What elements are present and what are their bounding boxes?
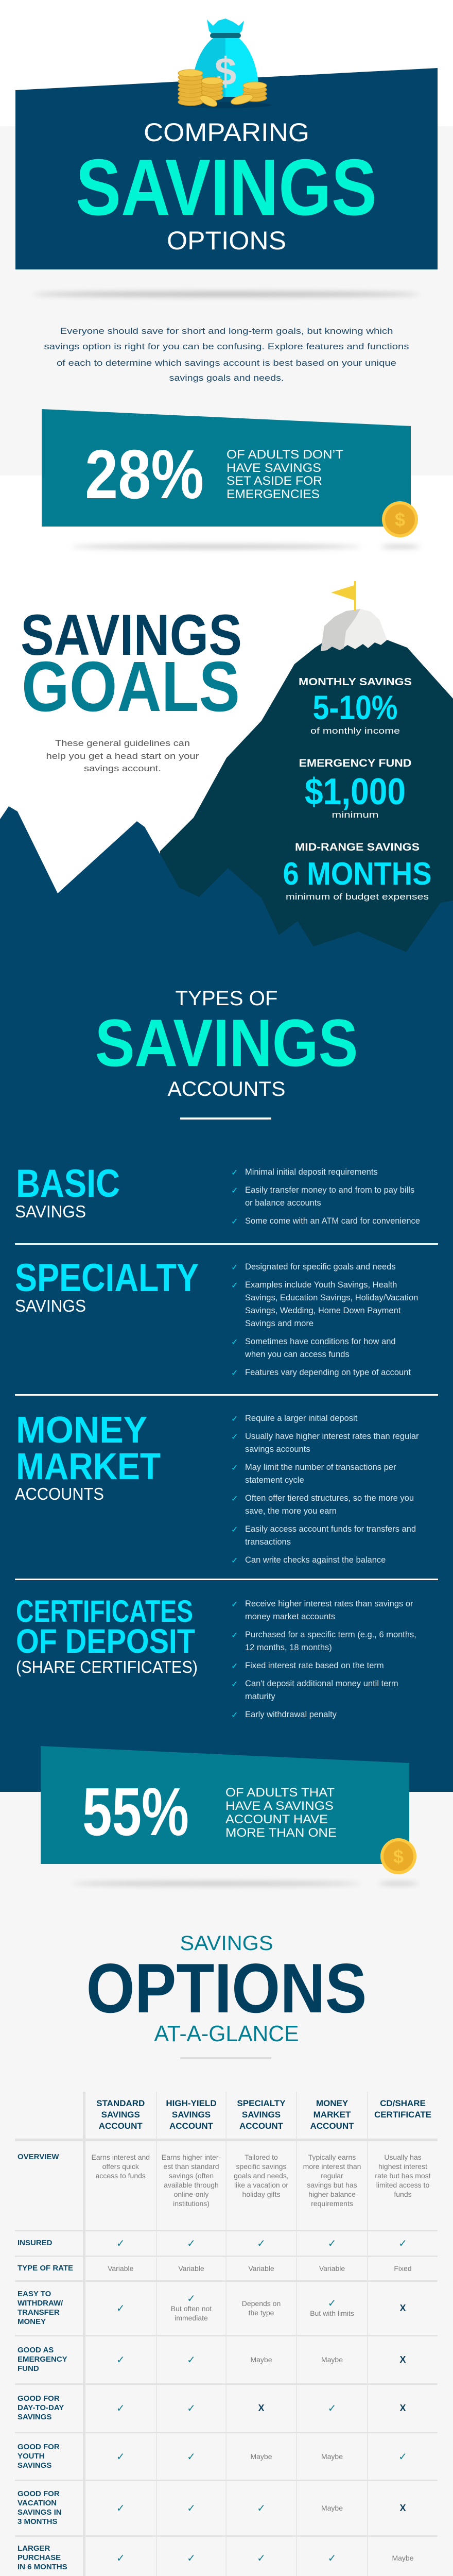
comparison table: X (399, 2303, 406, 2313)
bullets: certificates of deposit: ✓ (231, 1599, 238, 1609)
comparison table: online-only (174, 2190, 208, 2198)
stat box: 55% (41, 1746, 416, 1874)
heading: types of savings accounts (95, 987, 358, 1120)
comparison table: Maybe (250, 2452, 272, 2461)
goals intro text (46, 738, 199, 773)
bullets: certificates of deposit: 12 months, 18 months) (245, 1643, 332, 1652)
comparison table: ✓ (257, 2237, 266, 2249)
heading: savings options at-a-glance: OPTIONS (86, 1949, 367, 2027)
comparison table: SAVINGS (242, 2110, 281, 2120)
heading: types of savings accounts: SAVINGS (95, 1005, 358, 1080)
heading: types of savings accounts: ACCOUNTS (168, 1078, 285, 1100)
comparison table: offers quick (102, 2162, 139, 2170)
goals text block: 5-10% (313, 688, 397, 726)
comparison table: ✓ (328, 2237, 336, 2249)
comparison table: ✓ (257, 2502, 266, 2514)
comparison table: highest interest (378, 2162, 427, 2170)
comparison table: ✓ (116, 2552, 125, 2564)
bullets: specialty savings (231, 1262, 418, 1378)
comparison table: ✓ (187, 2353, 196, 2366)
comparison table: ✓ (328, 2297, 336, 2309)
comparison table: But often not (171, 2304, 212, 2313)
bullets: certificates of deposit: Can't deposit additional money until term (245, 1679, 398, 1688)
bullets: basic savings: Minimal initial deposit requirements (245, 1167, 378, 1177)
comparison table: X (399, 2403, 406, 2413)
bullets: basic savings: ✓ (231, 1216, 238, 1226)
goals text block: 6 MONTHS (283, 856, 431, 892)
background and graphics layer (0, 0, 453, 2059)
comparison table: ACCOUNT (310, 2121, 354, 2131)
account type headings: MARKET (16, 1446, 161, 1487)
comparison table: OVERVIEW (18, 2153, 59, 2161)
bullets: certificates of deposit (231, 1599, 416, 1720)
bullets: money market: ✓ (231, 1555, 238, 1565)
stat box: 55%: ACCOUNT HAVE (225, 1812, 328, 1826)
comparison table: EASY TO (18, 2290, 51, 2298)
comparison table: ✓ (398, 2450, 407, 2463)
bullets: specialty savings: when you can access funds (245, 1350, 350, 1359)
bullets: certificates of deposit: ✓ (231, 1630, 238, 1640)
comparison table: X (399, 2503, 406, 2513)
account type headings: CERTIFICATES (16, 1594, 193, 1629)
comparison table: ACCOUNT (99, 2121, 143, 2131)
comparison table: ✓ (187, 2292, 196, 2304)
bullets: basic savings: Easily transfer money to and from to pay bills (245, 1185, 414, 1195)
bullets: certificates of deposit: Fixed interest rate based on the term (245, 1661, 384, 1670)
bullets: basic savings: ✓ (231, 1167, 238, 1177)
comparison table: higher balance (308, 2190, 356, 2198)
comparison table: WITHDRAW/ (18, 2299, 63, 2308)
comparison table: Earns interest and (91, 2153, 150, 2161)
bullets: money market: Usually have higher interest rates than regular (245, 1432, 419, 1441)
bullets: money market: transactions (245, 1537, 291, 1547)
account type headings: (SHARE CERTIFICATES) (16, 1657, 198, 1676)
comparison table: Maybe (392, 2554, 414, 2562)
bullets: basic savings: or balance accounts (245, 1198, 321, 1208)
stat box: 55%: OF ADULTS THAT (225, 1786, 335, 1800)
bullets: specialty savings: Features vary depending on type of account (245, 1368, 411, 1377)
comparison table: EMERGENCY (18, 2355, 67, 2364)
comparison table: ✓ (187, 2237, 196, 2249)
comparison table: SAVINGS (18, 2413, 51, 2421)
account type headings: OF DEPOSIT (16, 1622, 195, 1660)
comparison table: HIGH-YIELD (166, 2098, 217, 2108)
bullets: money market: ✓ (231, 1463, 238, 1472)
goals text block: EMERGENCY FUND (299, 757, 412, 769)
goals text block (283, 676, 431, 902)
account type headings: SAVINGS (15, 1202, 86, 1221)
bullets: money market: ✓ (231, 1524, 238, 1534)
comparison table: SAVINGS (172, 2110, 211, 2120)
goals text block: $1,000 (305, 771, 406, 812)
bullets: money market: Require a larger initial deposit (245, 1414, 357, 1423)
bullets: specialty savings: ✓ (231, 1337, 238, 1347)
comparison table: LARGER (18, 2544, 50, 2553)
bullets: specialty savings: Designated for specific goals and needs (245, 1262, 396, 1272)
bullets: certificates of deposit: Purchased for a specific term (e.g., 6 months, (245, 1630, 416, 1639)
comparison table: MONEY (18, 2317, 46, 2326)
bullets: money market: ✓ (231, 1494, 238, 1503)
heading: savings goals: SAVINGS (21, 603, 242, 667)
account type headings: MONEY (16, 1410, 147, 1451)
comparison table: Typically earns (308, 2153, 356, 2161)
comparison table: Variable (178, 2264, 204, 2273)
bullets: certificates of deposit: Early withdrawal penalty (245, 1710, 337, 1719)
comparison table: IN 6 MONTHS (18, 2563, 67, 2571)
comparison table: FUND (18, 2364, 39, 2373)
bullets: money market: Often offer tiered structures, so the more you (245, 1494, 414, 1503)
bullets: specialty savings: Savings, Education Savings, Holiday/Vacation (245, 1293, 418, 1302)
comparison table: Variable (319, 2264, 345, 2273)
heading: savings goals: GOALS (22, 647, 240, 726)
comparison table: X (258, 2403, 265, 2413)
comparison table: goals and needs, (234, 2171, 289, 2179)
comparison table: holiday gifts (242, 2190, 280, 2198)
bullets: specialty savings: ✓ (231, 1280, 238, 1290)
comparison table: Fixed (394, 2264, 412, 2273)
bullets: money market: ✓ (231, 1432, 238, 1442)
comparison table: MONEY (316, 2098, 348, 2108)
comparison table: GOOD FOR (18, 2442, 60, 2451)
stat box: 28%: 28% (85, 435, 204, 513)
bullets: specialty savings: Savings, Wedding, Home Down Payment (245, 1306, 400, 1315)
comparison table: SAVINGS (101, 2110, 140, 2120)
bullets: certificates of deposit: ✓ (231, 1710, 238, 1720)
comparison table: ✓ (187, 2552, 196, 2564)
bullets: money market: Can write checks against the balance (245, 1555, 386, 1565)
comparison table: savings but has (307, 2180, 357, 2189)
account type headings: SPECIALTY (15, 1256, 199, 1300)
comparison table: GOOD FOR (18, 2489, 60, 2498)
goals intro text: help you get a head start on your (46, 751, 199, 761)
comparison table: Maybe (321, 2355, 343, 2364)
goals intro text: These general guidelines can (55, 738, 190, 748)
icon: coin (380, 1838, 416, 1874)
comparison table: ✓ (187, 2502, 196, 2514)
comparison table: limited access to (376, 2180, 429, 2189)
account type headings: SAVINGS (15, 1296, 86, 1315)
comparison table: access to funds (96, 2171, 146, 2179)
heading: savings goals (21, 603, 242, 726)
comparison table: GOOD AS (18, 2346, 54, 2354)
comparison table: TYPE OF RATE (18, 2264, 73, 2273)
header panel (15, 19, 438, 269)
goals text block: of monthly income (310, 726, 400, 736)
comparison table: more interest than (303, 2162, 361, 2170)
comparison table: ✓ (116, 2353, 125, 2366)
comparison table: SAVINGS (18, 2461, 51, 2470)
bullets: basic savings (231, 1167, 420, 1226)
comparison table: SPECIALTY (237, 2098, 286, 2108)
comparison table: MARKET (313, 2110, 351, 2120)
comparison table: ✓ (328, 2402, 336, 2414)
title (76, 118, 377, 255)
comparison table: VACATION (18, 2499, 57, 2507)
intro paragraph: Everyone should save for short and long-term goals, but knowing which (60, 326, 393, 336)
bullets: specialty savings: ✓ (231, 1262, 238, 1272)
heading: types of savings accounts: TYPES OF (175, 987, 278, 1010)
comparison table: rate but has most (375, 2171, 431, 2179)
comparison table: regular (321, 2171, 343, 2179)
bullets: money market: ✓ (231, 1414, 238, 1423)
heading: savings options at-a-glance: AT-A-GLANCE (154, 2021, 299, 2046)
comparison table: ✓ (116, 2402, 125, 2414)
bullets: specialty savings: Sometimes have conditions for how and (245, 1337, 396, 1346)
comparison table: Earns higher inter- (162, 2153, 221, 2161)
comparison table (15, 2092, 438, 2576)
title: OPTIONS (167, 226, 286, 255)
bullets: basic savings: Some come with an ATM card for convenience (245, 1216, 420, 1226)
comparison table: savings (often (169, 2171, 214, 2179)
heading: savings options at-a-glance: SAVINGS (180, 1932, 273, 1955)
comparison table: ✓ (116, 2302, 125, 2314)
comparison table: CD/SHARE (380, 2098, 426, 2108)
bullets: money market: savings accounts (245, 1445, 310, 1454)
icon: coin (382, 501, 418, 537)
title: COMPARING (144, 118, 309, 147)
bullets: basic savings: ✓ (231, 1185, 238, 1195)
comparison table: ✓ (116, 2502, 125, 2514)
comparison table: specific savings (236, 2162, 287, 2170)
comparison table: Depends on (242, 2299, 281, 2308)
goals text block: minimum of budget expenses (286, 892, 429, 902)
icon: money bag with coins (178, 19, 272, 109)
account type headings: ACCOUNTS (15, 1484, 104, 1503)
stat box: 28%: SET ASIDE FOR (226, 474, 322, 488)
comparison table: TRANSFER (18, 2308, 60, 2317)
comparison table: Tailored to (245, 2153, 278, 2161)
comparison table: Maybe (250, 2355, 272, 2364)
comparison table: ✓ (187, 2402, 196, 2414)
comparison table: ✓ (398, 2237, 407, 2249)
bullets: specialty savings: Examples include Youth Savings, Health (245, 1280, 397, 1290)
icon: coin: $ (393, 1846, 404, 1867)
icon: money bag with coins: $ (215, 50, 236, 94)
mountain illustration (0, 581, 453, 979)
comparison table: available through (164, 2180, 219, 2189)
comparison table: ✓ (116, 2237, 125, 2249)
account type headings: BASIC (16, 1162, 120, 1206)
comparison table: But with limits (310, 2309, 354, 2317)
comparison table: GOOD FOR (18, 2394, 60, 2403)
bullets: certificates of deposit: maturity (245, 1692, 275, 1701)
comparison table: PURCHASE (18, 2553, 61, 2562)
comparison table: ✓ (257, 2552, 266, 2564)
comparison table: INSURED (18, 2239, 53, 2247)
stat box: 28%: OF ADULTS DON’T (226, 448, 343, 462)
bullets: certificates of deposit: ✓ (231, 1661, 238, 1671)
comparison table: DAY-TO-DAY (18, 2403, 64, 2412)
comparison table: SAVINGS IN (18, 2508, 62, 2517)
comparison table: Variable (248, 2264, 274, 2273)
comparison table: funds (394, 2190, 412, 2198)
bullets: money market: Easily access account funds for transfers and (245, 1524, 416, 1534)
comparison table: institutions) (173, 2199, 210, 2207)
comparison table: X (399, 2354, 406, 2365)
comparison table: ✓ (328, 2552, 336, 2564)
icon: coin: $ (395, 509, 405, 530)
bullets: specialty savings: Savings and more (245, 1319, 313, 1328)
bullets: money market: save, the more you earn (245, 1506, 337, 1516)
bullets: certificates of deposit: Receive higher interest rates than savings or (245, 1599, 413, 1608)
comparison table: like a vacation or (234, 2180, 288, 2189)
stat box: 28%: HAVE SAVINGS (226, 461, 321, 475)
bullets: certificates of deposit: ✓ (231, 1679, 238, 1689)
stat box: 28% (42, 409, 418, 537)
goals intro text: savings account. (84, 764, 161, 773)
goals text block: MONTHLY SAVINGS (299, 676, 412, 688)
comparison table: ACCOUNT (239, 2121, 283, 2131)
comparison table: ✓ (116, 2450, 125, 2463)
comparison table: est than standard (163, 2162, 219, 2170)
comparison table: STANDARD (96, 2098, 145, 2108)
intro paragraph: of each to determine which savings account is best based on your unique (57, 358, 396, 368)
comparison table: 3 MONTHS (18, 2517, 58, 2526)
intro paragraph: savings option is right for you can be confusing. Explore features and functions (44, 342, 409, 351)
comparison table: ACCOUNT (169, 2121, 213, 2131)
comparison table: Variable (108, 2264, 133, 2273)
comparison table: requirements (311, 2199, 353, 2207)
stat box: 28%: EMERGENCIES (226, 487, 320, 501)
stat box: 55%: MORE THAN ONE (225, 1826, 337, 1840)
comparison table: Maybe (321, 2504, 343, 2512)
goals text block: MID-RANGE SAVINGS (295, 841, 420, 853)
comparison table: the type (249, 2309, 274, 2317)
bullets: certificates of deposit: money market accounts (245, 1612, 335, 1621)
bullets: money market: statement cycle (245, 1476, 304, 1485)
comparison table: YOUTH (18, 2451, 44, 2461)
heading: savings options at-a-glance (86, 1932, 367, 2059)
intro paragraph: savings goals and needs. (169, 373, 284, 383)
bullets: specialty savings: ✓ (231, 1368, 238, 1378)
bullets: money market: May limit the number of transactions per (245, 1463, 396, 1472)
comparison table: immediate (175, 2314, 208, 2322)
stat box: 55%: 55% (82, 1774, 189, 1850)
goals text block: minimum (332, 810, 379, 820)
stat box: 55%: HAVE A SAVINGS (225, 1799, 334, 1813)
bullets: money market (231, 1414, 419, 1565)
comparison table: CERTIFICATE (374, 2110, 431, 2120)
comparison table: Usually has (384, 2153, 422, 2161)
title: SAVINGS (76, 143, 377, 232)
comparison table: ✓ (187, 2450, 196, 2463)
account type headings (15, 1162, 199, 1676)
comparison table: Maybe (321, 2452, 343, 2461)
intro paragraph (44, 326, 409, 383)
